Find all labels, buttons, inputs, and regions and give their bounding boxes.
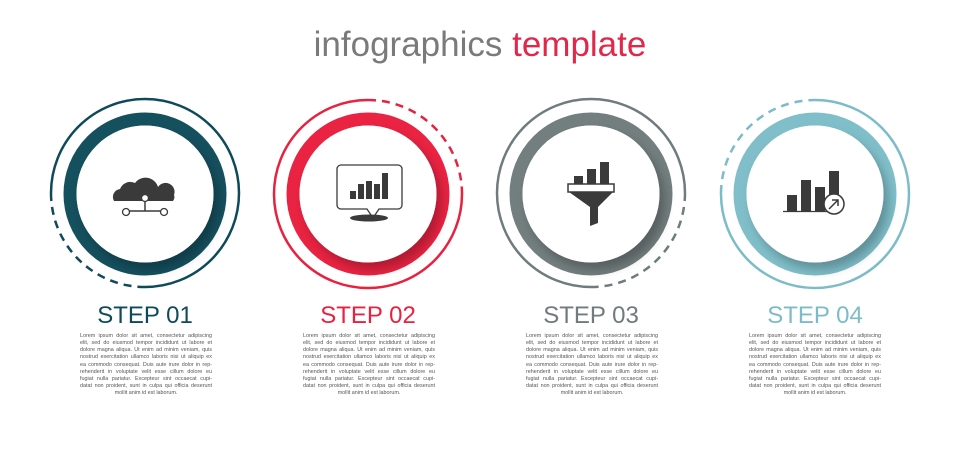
icon: cloud network — [113, 178, 175, 216]
step 2 text — [303, 333, 435, 396]
step 2 text: nostrud exercitation ullamco laboris nisi ut aliquip ex — [303, 354, 435, 360]
circle 1 — [51, 99, 239, 287]
icon: funnel — [568, 162, 614, 226]
icon: bar chart growth — [783, 171, 844, 214]
step 4 text: dolore magna aliqua. Ut enim ad minim veniam, quis — [749, 347, 881, 353]
step 1 text: nostrud exercitation ullamco laboris nisi ut aliquip ex — [80, 354, 212, 360]
step 3 text — [526, 333, 658, 396]
step 2 text: datat non proident, sunt in culpa qui officia deserunt — [303, 383, 435, 389]
step 4 text: elit, sed do eiusmod tempor incididunt ut labore et — [749, 340, 881, 346]
step 3 text: dolore magna aliqua. Ut enim ad minim veniam, quis — [526, 347, 658, 353]
step 3 text: Lorem ipsum dolor sit amet, consectetur adipiscing — [526, 333, 658, 339]
circle 2 — [274, 100, 462, 288]
step 2 text: ea commodo consequat. Duis aute irure dolor in rep- — [303, 362, 435, 368]
step 1 text: mollit anim id est laborum. — [115, 390, 177, 396]
step 4 text: rehenderit in voluptate velit esse cillum dolore eu — [749, 369, 881, 375]
step 1 text — [80, 333, 212, 396]
step 2 text: elit, sed do eiusmod tempor incididunt ut labore et — [303, 340, 435, 346]
step 1 text: datat non proident, sunt in culpa qui officia deserunt — [80, 383, 212, 389]
step 4 text: mollit anim id est laborum. — [784, 390, 846, 396]
icon: chart speech bubble — [337, 165, 402, 222]
step 4 text — [749, 333, 881, 396]
step 2 heading: STEP 02 — [320, 302, 416, 329]
step 2 text: Lorem ipsum dolor sit amet, consectetur adipiscing — [303, 333, 435, 339]
title: infographics template — [314, 25, 646, 64]
step 3 heading: STEP 03 — [543, 302, 639, 329]
step 2 text: mollit anim id est laborum. — [338, 390, 400, 396]
circle 3 — [497, 99, 685, 287]
step 1 text: fugiat nulla pariatur. Excepteur sint occaecat cupi- — [80, 376, 212, 382]
step 1 text: elit, sed do eiusmod tempor incididunt ut labore et — [80, 340, 212, 346]
step 4 text: nostrud exercitation ullamco laboris nisi ut aliquip ex — [749, 354, 881, 360]
step 4 text: ea commodo consequat. Duis aute irure dolor in rep- — [749, 362, 881, 368]
step 3 text: fugiat nulla pariatur. Excepteur sint occaecat cupi- — [526, 376, 658, 382]
step 3 text: datat non proident, sunt in culpa qui officia deserunt — [526, 383, 658, 389]
step 2 text: fugiat nulla pariatur. Excepteur sint occaecat cupi- — [303, 376, 435, 382]
step 3 text: mollit anim id est laborum. — [561, 390, 623, 396]
step 4 text: fugiat nulla pariatur. Excepteur sint occaecat cupi- — [749, 376, 881, 382]
step 2 text: dolore magna aliqua. Ut enim ad minim veniam, quis — [303, 347, 435, 353]
step 1 text: dolore magna aliqua. Ut enim ad minim veniam, quis — [80, 347, 212, 353]
step 3 text: elit, sed do eiusmod tempor incididunt ut labore et — [526, 340, 658, 346]
step 1 heading: STEP 01 — [97, 302, 193, 329]
step 3 text: rehenderit in voluptate velit esse cillum dolore eu — [526, 369, 658, 375]
step 2 text: rehenderit in voluptate velit esse cillum dolore eu — [303, 369, 435, 375]
step 4 text: Lorem ipsum dolor sit amet, consectetur adipiscing — [749, 333, 881, 339]
step 1 text: ea commodo consequat. Duis aute irure dolor in rep- — [80, 362, 212, 368]
step 4 text: datat non proident, sunt in culpa qui officia deserunt — [749, 383, 881, 389]
step 3 text: ea commodo consequat. Duis aute irure dolor in rep- — [526, 362, 658, 368]
circle 4 — [721, 100, 909, 288]
step 1 text: Lorem ipsum dolor sit amet, consectetur adipiscing — [80, 333, 212, 339]
step 1 text: rehenderit in voluptate velit esse cillum dolore eu — [80, 369, 212, 375]
step 3 text: nostrud exercitation ullamco laboris nisi ut aliquip ex — [526, 354, 658, 360]
step 4 heading: STEP 04 — [767, 302, 863, 329]
